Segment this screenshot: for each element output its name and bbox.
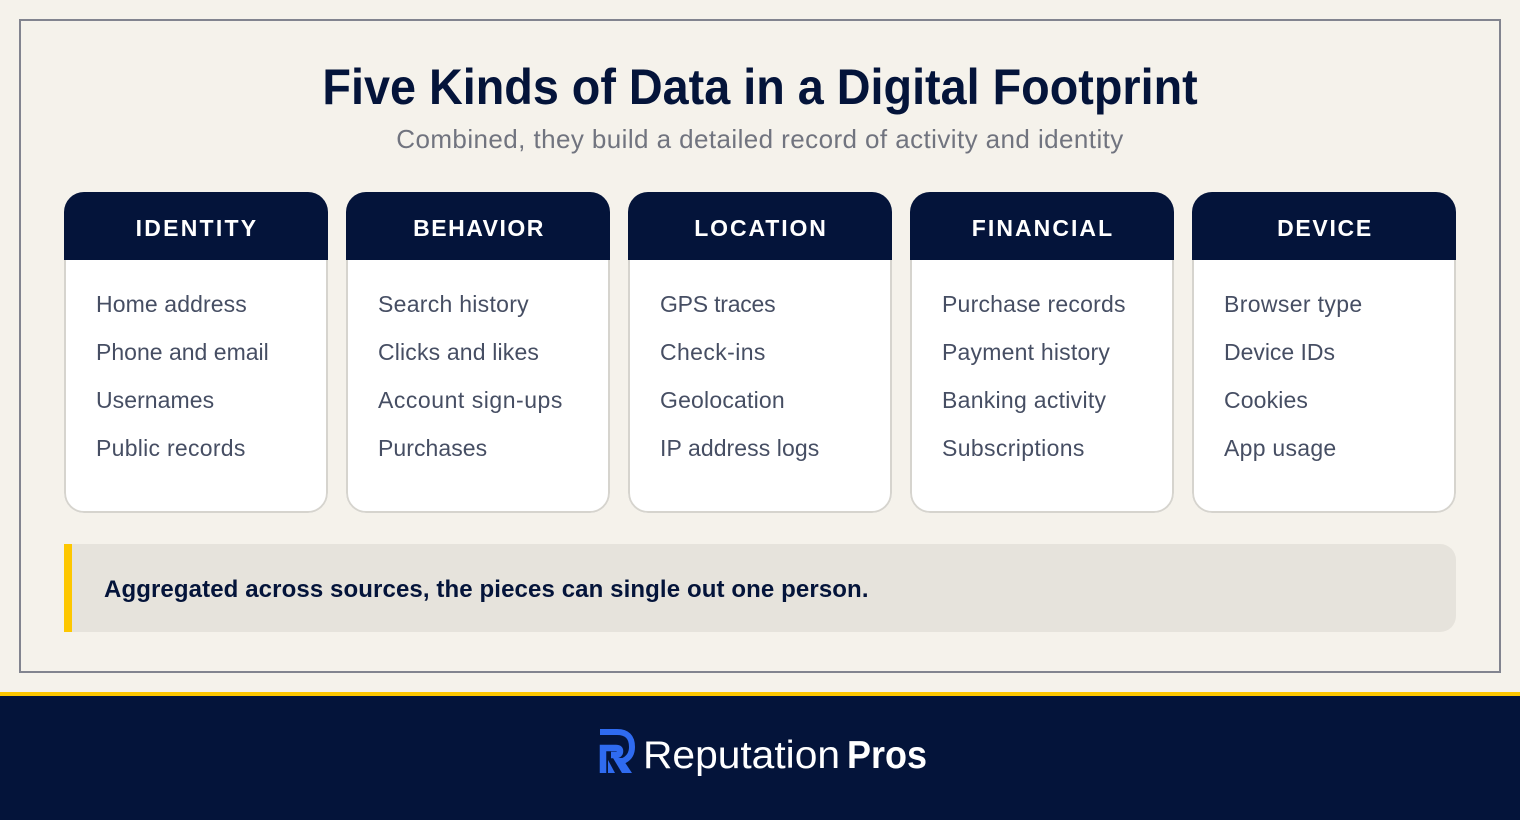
card border xyxy=(1192,192,1456,513)
item: browser type: Browser type xyxy=(1224,291,1363,317)
item: banking activity: Banking activity xyxy=(942,387,1106,413)
card border xyxy=(628,192,892,513)
heading: device xyxy=(1192,192,1456,260)
callout accent bar xyxy=(64,544,72,632)
item: ip address logs: IP address logs xyxy=(660,435,819,461)
wordmark bold: Pros xyxy=(847,734,927,777)
callout text: Aggregated across sources, the pieces can single out one person. xyxy=(104,576,869,603)
card border xyxy=(64,192,328,513)
item: subscriptions: Subscriptions xyxy=(942,435,1085,461)
item: purchases: Purchases xyxy=(378,435,487,461)
heading: behavior xyxy=(346,192,610,260)
heading: location xyxy=(628,192,892,260)
item: public records: Public records xyxy=(96,435,246,461)
title: Five Kinds of Data in a Digital Footprint xyxy=(322,59,1198,115)
panel: device xyxy=(1192,192,1456,513)
item: account sign-ups: Account sign-ups xyxy=(378,387,563,413)
icon: R mark xyxy=(600,732,632,773)
panel: location xyxy=(628,192,892,513)
item: gps traces: GPS traces xyxy=(660,291,775,317)
item: payment history: Payment history xyxy=(942,339,1110,365)
heading: financial xyxy=(910,192,1174,260)
card border xyxy=(346,192,610,513)
item: usernames: Usernames xyxy=(96,387,214,413)
panel: identity xyxy=(64,192,328,513)
item: purchase records: Purchase records xyxy=(942,291,1126,317)
heading: identity xyxy=(64,192,328,260)
outer frame xyxy=(19,19,1501,673)
item: device ids: Device IDs xyxy=(1224,339,1335,365)
item: check-ins: Check-ins xyxy=(660,339,766,365)
item: home address: Home address xyxy=(96,291,247,317)
heading: device: DEVICE xyxy=(1277,215,1373,241)
panel: behavior xyxy=(346,192,610,513)
heading: location: LOCATION xyxy=(694,215,828,241)
item: geolocation: Geolocation xyxy=(660,387,785,413)
card border xyxy=(910,192,1174,513)
subtitle: Combined, they build a detailed record of activity and identity xyxy=(396,124,1124,154)
item: cookies: Cookies xyxy=(1224,387,1308,413)
item: clicks and likes: Clicks and likes xyxy=(378,339,539,365)
item: app usage: App usage xyxy=(1224,435,1336,461)
wordmark: Reputation xyxy=(643,734,840,777)
logo: Reputation Pros xyxy=(600,729,927,777)
heading: behavior: BEHAVIOR xyxy=(413,215,545,241)
heading: identity: IDENTITY xyxy=(136,215,258,241)
item: search history: Search history xyxy=(378,291,529,317)
panel: financial xyxy=(910,192,1174,513)
heading: financial: FINANCIAL xyxy=(972,215,1114,241)
footer band xyxy=(0,692,1520,820)
item: phone and email: Phone and email xyxy=(96,339,269,365)
callout xyxy=(64,544,1456,632)
